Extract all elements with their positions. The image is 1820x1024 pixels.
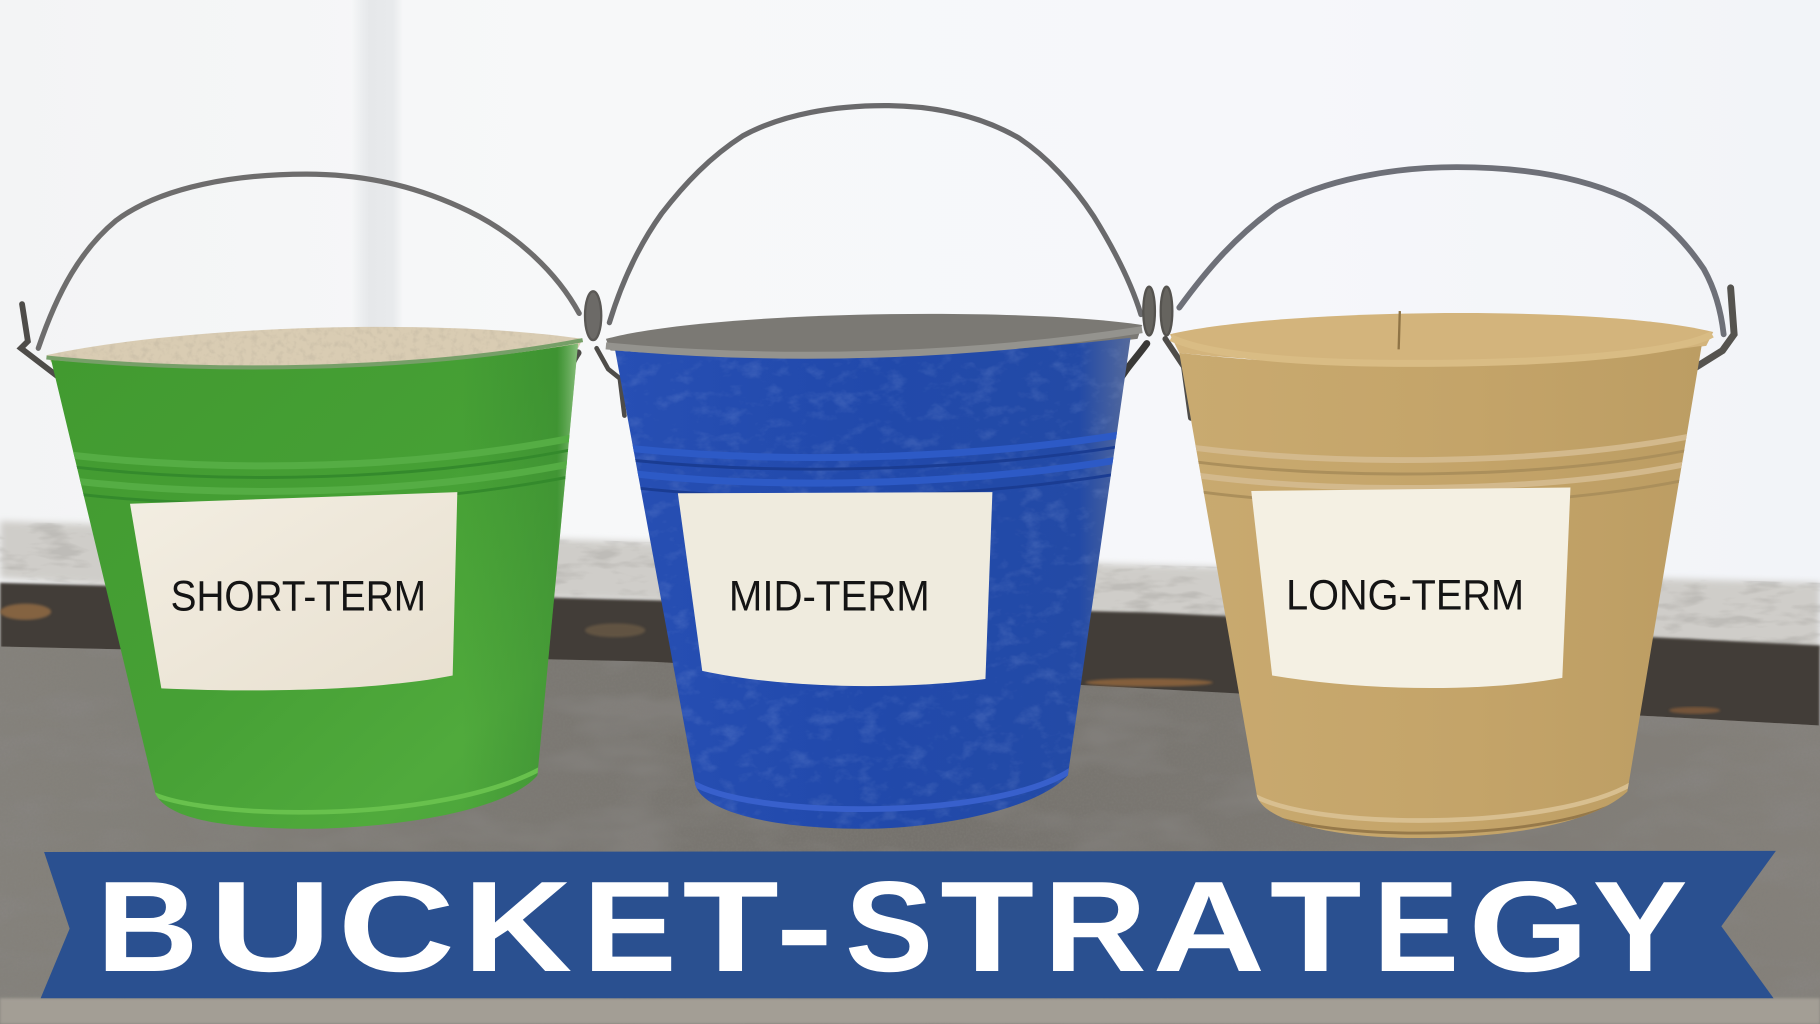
green bucket body: [46, 340, 583, 829]
title text: -: [775, 855, 833, 999]
title text: K: [463, 855, 572, 999]
title text: T: [1270, 855, 1362, 999]
title text: E: [583, 855, 677, 999]
mid-term label: MID-TERM: [729, 573, 930, 621]
title text: T: [682, 855, 779, 999]
short-term label: SHORT-TERM: [171, 573, 426, 621]
title text: T: [940, 855, 1034, 999]
bucket: long-term (tan): [1161, 167, 1734, 838]
title text: R: [1043, 855, 1147, 999]
title text: E: [1373, 855, 1459, 999]
title text: C: [338, 855, 455, 999]
bucket: short-term (green): [21, 174, 601, 829]
title text: A: [1153, 855, 1265, 999]
bucket: mid-term (blue): [597, 106, 1155, 829]
blue bucket interior: [606, 314, 1142, 356]
blue bucket handle: [597, 106, 1155, 418]
title text: S: [845, 855, 933, 999]
title banner: [41, 851, 1776, 999]
blue bucket body: [606, 330, 1142, 829]
title text: U: [209, 855, 332, 999]
long-term label: [1251, 488, 1570, 688]
tan bucket body: [1171, 311, 1712, 838]
title text: G: [1468, 855, 1589, 999]
mid-term label: [678, 492, 992, 686]
green bucket interior: [46, 327, 583, 370]
title text: B: [96, 855, 198, 999]
tan bucket handle: [1161, 167, 1734, 418]
short-term label: [130, 492, 457, 690]
long-term label: LONG-TERM: [1286, 571, 1524, 619]
title text: Y: [1593, 855, 1688, 999]
tan bucket interior: [1170, 313, 1713, 364]
green bucket handle: [21, 174, 601, 434]
